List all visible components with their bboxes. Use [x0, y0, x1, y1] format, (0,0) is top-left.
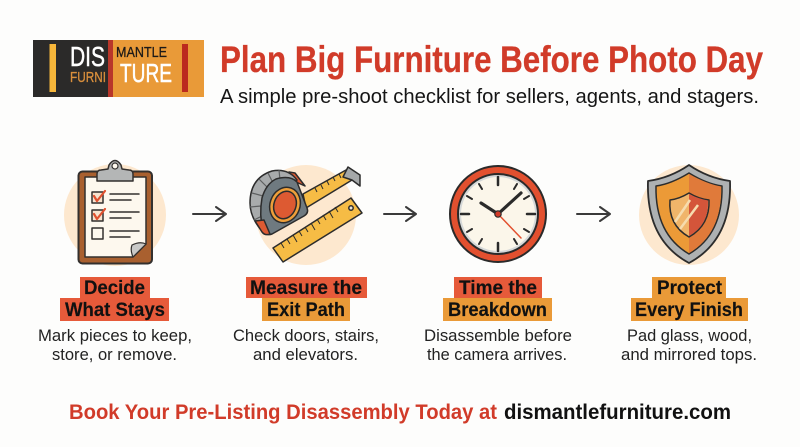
step 2: measure the exit path	[233, 277, 379, 364]
description 2: and elevators.	[253, 345, 358, 364]
heading highlight 1: Decide	[84, 278, 145, 299]
logo: MANTLE	[116, 44, 167, 61]
description 3: the camera arrives.	[427, 345, 567, 364]
heading highlight 4: Protect	[657, 278, 723, 299]
step 3: time the breakdown	[424, 277, 572, 364]
arrow 3	[577, 207, 610, 221]
heading highlight 2: Exit Path	[267, 300, 345, 321]
logo: TURE	[120, 58, 172, 88]
description 1: Mark pieces to keep,	[38, 326, 192, 345]
description 4: Pad glass, wood,	[627, 326, 752, 345]
logo: DIS	[70, 41, 105, 72]
heading highlight 2: Measure the	[250, 278, 362, 299]
footer call to action: dismantlefurniture.com	[504, 400, 731, 424]
icon: clipboard checklist	[64, 160, 166, 266]
logo	[33, 40, 204, 97]
icon: tape measure and ruler	[250, 165, 362, 265]
description 4	[621, 326, 757, 364]
description 1	[38, 326, 192, 364]
heading highlight 4	[631, 277, 748, 321]
subtitle: A simple pre-shoot checklist for sellers, agents, and stagers.	[220, 85, 759, 108]
description 3: Disassemble before	[424, 326, 572, 345]
heading highlight 4: Every Finish	[635, 300, 743, 321]
step 4: protect every finish	[621, 277, 757, 364]
description 2	[233, 326, 379, 364]
description 4: and mirrored tops.	[621, 345, 757, 364]
icon: shield	[639, 165, 739, 265]
heading highlight 2	[246, 277, 367, 321]
arrow 2	[384, 207, 416, 221]
step 1: decide what stays	[38, 277, 192, 364]
description 2: Check doors, stairs,	[233, 326, 379, 345]
arrow 1	[193, 207, 226, 221]
footer call to action: Book Your Pre-Listing Disassembly Today at	[69, 400, 497, 424]
description 1: store, or remove.	[52, 345, 177, 364]
heading highlight 1	[60, 277, 169, 321]
heading highlight 1: What Stays	[65, 300, 165, 321]
heading highlight 3: Breakdown	[448, 300, 547, 321]
description 3	[424, 326, 572, 364]
footer call to action	[69, 400, 731, 424]
heading highlight 3	[443, 277, 552, 321]
icon: clock	[450, 166, 546, 262]
heading highlight 3: Time the	[459, 278, 537, 299]
logo: FURNI	[70, 69, 106, 86]
